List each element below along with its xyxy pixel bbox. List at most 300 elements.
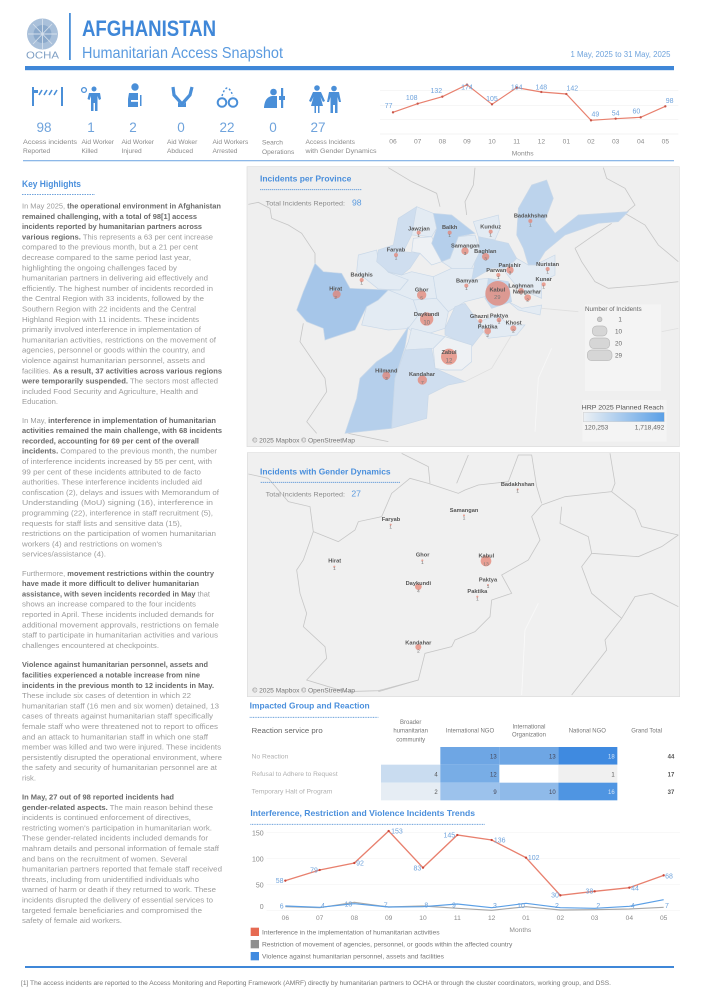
series: violence: 2 [596, 903, 600, 910]
line chart: monthly incidents: 02 [587, 139, 595, 146]
KPI 2 injured: Injured [122, 148, 142, 155]
paragraph: overview: primarily involved interference in implementation of [22, 325, 202, 334]
paragraph: violence: persistently disrupted the operational environment, where [22, 753, 222, 762]
province labels: 2 [512, 328, 515, 334]
paragraph: movement restrictions: shows an increase compared to the four incidents [22, 600, 196, 609]
paragraph: interference: restrictions on the participation of women humanitarian [22, 529, 216, 538]
line chart: monthly incidents: 11 [513, 139, 520, 146]
panel: key highlights [21, 179, 222, 925]
series: violence: 6 [280, 903, 284, 910]
column headers: humanitarian [393, 729, 428, 735]
province labels: Kunduz [480, 225, 501, 231]
icon: handcuffs [218, 88, 237, 107]
paragraph: overview: were temporarily suspended. The sectors most affected [21, 377, 218, 386]
province labels: 1 [497, 275, 500, 281]
labels: 1 [421, 560, 424, 566]
KPI 0 search: Operations [262, 149, 295, 156]
KPI 1 killed: 1 [87, 120, 95, 135]
series: violence: 7 [665, 903, 669, 910]
paragraph: violence: Violence against humanitarian personnel, assets and [22, 660, 208, 669]
legend: number of incidents: 20 [615, 341, 623, 348]
icon: gender pair [309, 85, 341, 113]
x axis: 03 [591, 915, 599, 922]
KPI 1 killed: Killed [82, 148, 98, 155]
line chart: monthly incidents: 132 [431, 88, 442, 95]
paragraph: violence: female staff who were threatened not to report to offices [22, 722, 218, 731]
KPI 0 abducted: 0 [177, 120, 185, 135]
series: interference: 79 [310, 867, 318, 874]
paragraph: overview: humanitarian activities, restrictions on the movement of [22, 335, 217, 344]
province labels: Jawzjan [408, 227, 430, 233]
surrounding borders [248, 168, 678, 442]
labels: Badakhshan [501, 482, 535, 488]
paragraph: overview: decrease compared to the same period last year, [22, 253, 191, 262]
paragraph: interference: activities remained the main challenge, with 68 incidents [22, 426, 222, 435]
paragraph: overview: remained challenging, with a total of 98[1] access [22, 212, 197, 221]
x axis: 04 [626, 915, 633, 922]
row: no reaction: 13 [549, 755, 556, 761]
date range: 1 May, 2025 to 31 May, 2025 [570, 50, 671, 59]
series: violence: 8 [424, 903, 428, 910]
labels: Hirat [328, 559, 341, 565]
labels: 1 [389, 525, 392, 531]
line chart: monthly incidents: 60 [632, 109, 640, 116]
series: interference: 30 [551, 893, 559, 900]
row: temporary halt: 37 [668, 790, 675, 796]
province labels: 10 [423, 321, 431, 327]
paragraph: gender: incidents disrupted the delivery of essential services to [22, 896, 213, 904]
KPI 2 injured: Aid Worker [122, 139, 155, 146]
province labels: Faryab [387, 248, 406, 254]
paragraph: gender: targeted female beneficiaries and compromised the [22, 906, 202, 915]
row: temporary halt: 16 [608, 790, 615, 796]
column headers: National NGO [569, 729, 606, 735]
series: interference: 44 [631, 885, 639, 892]
column headers [252, 720, 662, 743]
legend: HRP planned reach [582, 400, 667, 442]
total incidents: 98 [352, 197, 362, 207]
x axis: 02 [557, 915, 564, 922]
province labels: Bamyan [456, 279, 479, 285]
row: refusal [252, 765, 675, 783]
x axis: 09 [385, 915, 393, 922]
province labels: 3 [385, 376, 388, 382]
map credit: © 2025 Mapbox © OpenStreetMap [252, 437, 356, 444]
paragraph: gender: gender-related aspects. The main reason behind these [22, 803, 213, 812]
series: violence: 2 [555, 903, 559, 910]
line chart: monthly incidents: 164 [511, 84, 523, 91]
heading: Impacted Group and Reaction [250, 701, 370, 711]
column headers: Reaction service pro [252, 728, 323, 735]
province labels: 1 [498, 320, 501, 326]
paragraph: gender: threats, including from unidentified individuals who [22, 875, 199, 884]
province labels: 1 [489, 232, 492, 238]
row: refusal: 4 [434, 772, 438, 778]
paragraph: interference: recorded, accounting for 69 per cent of the overall [22, 436, 199, 445]
KPI 1 killed: Aid Worker [82, 139, 115, 146]
icon: aid worker killed [82, 86, 101, 111]
labels: Paktya [479, 578, 498, 584]
province labels [329, 213, 560, 386]
province shapes [297, 180, 628, 433]
x axis: 06 [282, 915, 289, 922]
total incidents [266, 488, 361, 499]
province labels: 1 [417, 233, 420, 239]
series: interference: 102 [528, 855, 540, 862]
province labels: Nuristan [536, 262, 560, 268]
paragraph: overview: highlighting the ongoing challenges faced by [22, 263, 177, 272]
paragraph: gender: restricting women's participation in humanitarian work. [22, 823, 212, 832]
paragraph: gender: warned of harm or death if they returned to work. These [21, 885, 216, 894]
paragraph: gender: incidents is continued enforcement of directives, [22, 813, 191, 822]
province labels: Hirat [329, 286, 342, 292]
province labels: 2 [486, 333, 489, 339]
line chart: monthly incidents: 49 [591, 111, 599, 118]
line chart: monthly incidents: 77 [385, 103, 393, 110]
paragraph: gender: mahram details and personal information of female staff [22, 844, 220, 853]
labels: Kandahar [405, 641, 432, 647]
labels: Paktika [467, 589, 488, 595]
y axis: 50 [256, 883, 264, 890]
total incidents [266, 197, 362, 208]
row: refusal: 1 [611, 772, 615, 778]
labels: 1 [463, 515, 466, 521]
y axis: 150 [252, 830, 264, 837]
legend: number of incidents: 29 [615, 353, 623, 360]
KPI 0 search [262, 120, 295, 156]
x axis: 08 [351, 915, 358, 922]
x axis: 07 [316, 915, 324, 922]
map heading: Incidents with Gender Dynamics [260, 467, 391, 476]
x axis: 05 [660, 915, 668, 922]
heading: Interference, Restriction and Violence Incidents Trends [250, 808, 475, 818]
legend: number of incidents: 10 [615, 329, 623, 336]
line chart: monthly incidents: 08 [439, 139, 446, 146]
line chart: monthly incidents: 07 [414, 139, 422, 146]
province labels: Balkh [442, 225, 458, 231]
line chart: monthly incidents: 54 [612, 110, 620, 117]
panel: incidents trends chart [250, 808, 680, 960]
line chart: monthly incidents: 105 [486, 96, 498, 103]
column headers: Broader [400, 720, 421, 726]
paragraph: violence: humanitarian staff (16 men and six women) detained, 13 [22, 701, 219, 710]
panel: incidents per province map [247, 167, 679, 447]
column headers: International [513, 724, 545, 730]
series: interference: 83 [413, 865, 421, 872]
map credit: © 2025 Mapbox © OpenStreetMap [252, 687, 356, 694]
paragraph: overview: efficiently. The highest number of incidents recorded in [22, 284, 213, 293]
province labels: Ghor [415, 287, 429, 293]
paragraph: interference: incidents. Compared to the previous month, the number [22, 447, 217, 456]
province labels: Khost [506, 321, 522, 327]
KPI 27 gender: with Gender Dynamics [304, 148, 377, 155]
province labels: 1 [520, 290, 523, 296]
KPI 22 arrested: 22 [219, 120, 235, 135]
map heading: Incidents per Province [260, 174, 352, 183]
labels: 4 [417, 589, 420, 595]
legend: HRP planned reach: HRP 2025 Planned Reach [582, 404, 664, 411]
province labels: 3 [509, 270, 512, 276]
labels: Ghor [416, 553, 430, 559]
province labels: Kabul [489, 287, 506, 293]
province labels: 3 [484, 256, 487, 262]
bubbles [333, 488, 519, 650]
OCHA logo: OCHA [26, 50, 59, 62]
total incidents: Total Incidents Reported: [266, 201, 345, 208]
row: temporary halt: 10 [549, 790, 556, 796]
panel: impacted group and reaction table [250, 701, 675, 800]
column headers: community [396, 737, 425, 743]
title: AFGHANISTAN [82, 16, 216, 41]
y axis: 0 [260, 904, 264, 911]
province labels: Paktika [478, 324, 498, 330]
province labels: Kandahar [409, 372, 436, 378]
paragraph: violence: risk. [22, 774, 36, 782]
paragraph: interference: 99 per cent of these incidents attributed to de facto [22, 467, 201, 476]
labels: Daykundi [406, 581, 431, 587]
province labels: 2 [334, 295, 337, 301]
total incidents: Total Incidents Reported: [266, 492, 345, 499]
paragraph: overview: violence against humanitarian personnel, assets and [22, 356, 205, 365]
labels: Kabul [478, 554, 495, 560]
KPI 0 search: 0 [269, 120, 277, 135]
paragraph: gender [21, 792, 222, 925]
KPI 0 search: Search [262, 140, 283, 146]
panel: incidents with gender dynamics map [247, 453, 680, 697]
x axis: Months [509, 927, 532, 934]
line chart: monthly incidents: 05 [662, 139, 669, 146]
province labels: Parwan [486, 268, 507, 274]
paragraph: interference: programming (22), interference in staff recruitment (5), [22, 508, 213, 518]
chart legend [251, 928, 513, 960]
province labels: 1 [360, 280, 363, 286]
line chart: monthly incidents: 06 [389, 139, 397, 146]
KPI 0 abducted: Aid Woker [167, 139, 198, 146]
heading: key highlights: Key Highlights [22, 179, 81, 189]
paragraph: overview: Highland Region with 11 incidents. These incidents [22, 315, 199, 324]
labels: 1 [516, 489, 519, 495]
province bubbles [333, 219, 550, 385]
province labels: Kunar [535, 277, 553, 283]
row: temporary halt: 2 [434, 790, 438, 796]
paragraph: gender: These gender-related incidents included demands for [22, 834, 208, 843]
province labels: Hilmand [375, 368, 398, 374]
paragraph: overview: included Food Security and Agriculture, Health and [22, 387, 198, 396]
total incidents: 27 [351, 488, 361, 498]
province labels: 1 [546, 269, 549, 275]
KPI 1 killed [82, 120, 115, 155]
paragraph: violence: and an attack to humanitarian staff in which one staff [22, 732, 209, 741]
series: interference: 92 [356, 860, 364, 867]
labels: 1 [476, 597, 479, 603]
y axis: 100 [252, 857, 264, 864]
OCHA logo [26, 18, 59, 62]
province labels: 5 [420, 295, 423, 301]
column headers: International NGO [446, 729, 494, 735]
KPI 98 access incidents: 98 [36, 120, 52, 135]
series: violence: 3 [493, 903, 497, 910]
row: no reaction [252, 747, 675, 765]
paragraph: interference: authorities. These interference incidents included aid [22, 478, 202, 487]
paragraph: gender: humanitarian partners reported that female staff received [22, 865, 222, 874]
paragraph: overview: humanitarian partners in delivering aid effectively and [22, 274, 208, 283]
series: violence: 7 [384, 903, 388, 910]
KPI 98 access incidents: Reported [23, 148, 50, 155]
province labels: 7 [421, 380, 424, 386]
province labels: 1 [465, 286, 468, 292]
paragraph: interference [21, 416, 222, 559]
series: interference: 58 [276, 878, 284, 885]
x axis [282, 915, 668, 934]
province labels: Panjshir [498, 263, 522, 269]
paragraph: movement restrictions: assistance, with seven incidents recorded in May that [22, 589, 211, 598]
KPI 27 gender [304, 120, 377, 155]
row: refusal: Refusal to Adhere to Request [252, 772, 338, 778]
series: interference [276, 828, 673, 900]
KPI 27 gender: Access Incidents [306, 139, 356, 146]
province labels: 2 [526, 298, 529, 304]
x axis: 12 [488, 915, 496, 922]
KPI 22 arrested [212, 120, 249, 155]
series: interference: 153 [391, 828, 403, 835]
province labels: 1 [395, 256, 398, 262]
province labels: 29 [494, 295, 500, 301]
paragraph: overview [21, 202, 222, 406]
paragraph: movement restrictions: Furthermore, movement restrictions within the country [22, 569, 215, 578]
KPI 98 access incidents: Access incidents [23, 139, 78, 146]
series: violence: 4 [631, 903, 635, 910]
line chart: monthly incidents: Months [512, 151, 534, 158]
icon: aid worker abducted [173, 87, 192, 107]
paragraph: violence: These include six cases of detention in which 22 [22, 691, 191, 700]
paragraph: overview: Education. [22, 397, 58, 406]
line chart: monthly incidents: 10 [488, 139, 496, 146]
KPI 22 arrested: Aid Workers [212, 139, 249, 146]
province labels: 3 [464, 251, 467, 257]
paragraph: violence: the safety and security of humanitarian personnel are at [22, 763, 218, 772]
line chart: monthly incidents: 98 [666, 98, 674, 105]
province labels: Nangarhar [513, 290, 542, 296]
paragraph: violence [22, 660, 222, 782]
labels: 13 [483, 561, 489, 567]
column headers: Organization [512, 733, 546, 739]
paragraph: interference: of interference incidents increased by 55 per cent, with [22, 457, 212, 466]
province labels: Daykundi [414, 312, 440, 318]
province labels: Badghis [351, 273, 373, 279]
series: violence [280, 900, 669, 910]
series: interference: 38 [585, 889, 593, 896]
row: temporary halt: 9 [493, 790, 497, 796]
column headers: Grand Total [631, 729, 662, 735]
paragraph: interference: Understanding (MoU) signing (16), interference in [22, 498, 213, 507]
labels: Faryab [382, 517, 401, 523]
paragraph: interference: services/assistance (4). [22, 550, 106, 559]
series: violence: 10 [517, 903, 525, 910]
line chart: monthly incidents [380, 83, 678, 158]
paragraph: overview: various regions. This represents a 63 per cent increase [22, 232, 213, 241]
paragraph: violence: cases of threats against humanitarian staff specifically [22, 712, 213, 721]
province labels: Zabul [441, 350, 457, 356]
row: refusal: 12 [490, 772, 497, 778]
KPI 2 injured [122, 120, 155, 155]
labels: Samangan [450, 508, 479, 514]
paragraph: overview: facilities. As a result, 37 activities across various regions [22, 366, 222, 375]
legend: number of incidents: 1 [618, 317, 622, 324]
province labels: 1 [542, 284, 545, 290]
labels: 2 [417, 649, 420, 655]
footnote: [1] The access incidents are reported to the Access Monitoring and Reporting Framework (AMRF) directly by humanitarian partners to OCHA or through the cluster coordinators, working group, and DSS. [21, 980, 611, 987]
paragraph: interference: In May, interference in implementation of humanitarian [22, 416, 216, 425]
province labels: 1 [479, 320, 482, 326]
province labels: 1 [529, 222, 532, 228]
paragraph: interference: requests for staff lists and sensitive data (15), [22, 519, 182, 528]
paragraph: overview: agencies, personnel or goods within the country, and [22, 346, 205, 355]
legend: number of incidents [585, 304, 661, 391]
series: interference: 68 [665, 873, 673, 880]
line chart: monthly incidents: 04 [637, 139, 645, 146]
paragraph: movement restrictions: have made it more difficult to deliver humanitarian [22, 579, 199, 588]
chart legend: Interference in the implementation of humanitarian activities [262, 929, 440, 936]
paragraph: gender: safety of female aid workers. [22, 916, 122, 925]
paragraph: movement restrictions: additional movement approvals, restrictions on female [22, 620, 219, 629]
x axis: 01 [522, 915, 530, 922]
row: temporary halt: Temporary Halt of Program [252, 790, 332, 796]
labels [328, 482, 535, 655]
icon: road barrier [32, 87, 63, 106]
paragraph: overview: incidents reported by humanitarian partners across [22, 222, 202, 231]
row: no reaction: 18 [608, 755, 615, 761]
line chart: monthly incidents: 01 [563, 139, 570, 146]
line chart: monthly incidents: 108 [406, 95, 418, 102]
line chart: monthly incidents: 03 [612, 139, 620, 146]
labels: 1 [487, 584, 490, 590]
paragraph: overview: In May 2025, the operational environment in Afghanistan [22, 202, 221, 210]
province labels: Laghman [508, 284, 534, 290]
icon: search operations [264, 88, 285, 108]
series: violence: 9 [452, 902, 456, 909]
line chart: monthly incidents: 142 [567, 86, 578, 93]
legend: HRP planned reach: 120,253 [584, 425, 609, 432]
paragraph: interference: confiscation (2), delays and issues with Memorandum of [22, 488, 220, 497]
paragraph: overview: compared to the previous month, but a 21 per cent [22, 243, 199, 252]
series: restriction [285, 902, 664, 910]
header [25, 13, 674, 70]
KPI 98 access incidents [23, 120, 78, 155]
KPI 2 injured: 2 [129, 120, 137, 135]
paragraph: violence: member was killed and two were injured. These incidents [22, 743, 221, 752]
paragraph: violence: incidents in the previous month to 12 incidents in May. [22, 681, 214, 690]
line chart: monthly incidents: 148 [536, 85, 547, 92]
series: interference: 145 [444, 832, 455, 839]
series: violence: 13 [344, 901, 352, 908]
paragraph: gender: In May, 27 out of 98 reported incidents had [22, 792, 174, 802]
KPI 27 gender: 27 [310, 120, 326, 135]
chart legend: Restriction of movement of agencies, personnel, or goods within the affected country [262, 941, 513, 948]
province labels: Ghazni [470, 314, 489, 320]
paragraph: interference: workers (4) and restrictions on women's [21, 539, 162, 548]
row: temporary halt [252, 783, 675, 800]
icon: aid worker injured [128, 83, 142, 107]
province labels: Badakhshan [514, 213, 548, 219]
legend: number of incidents: Number of Incidents [585, 306, 642, 313]
row: no reaction: 44 [668, 755, 675, 761]
series: violence: 4 [321, 903, 325, 910]
row: no reaction: 13 [490, 755, 497, 761]
row: no reaction: No Reaction [252, 754, 288, 760]
province labels: 12 [446, 358, 453, 364]
x axis: 11 [454, 915, 461, 922]
paragraph: gender: and bans on the recruitment of women. Several [22, 854, 187, 863]
